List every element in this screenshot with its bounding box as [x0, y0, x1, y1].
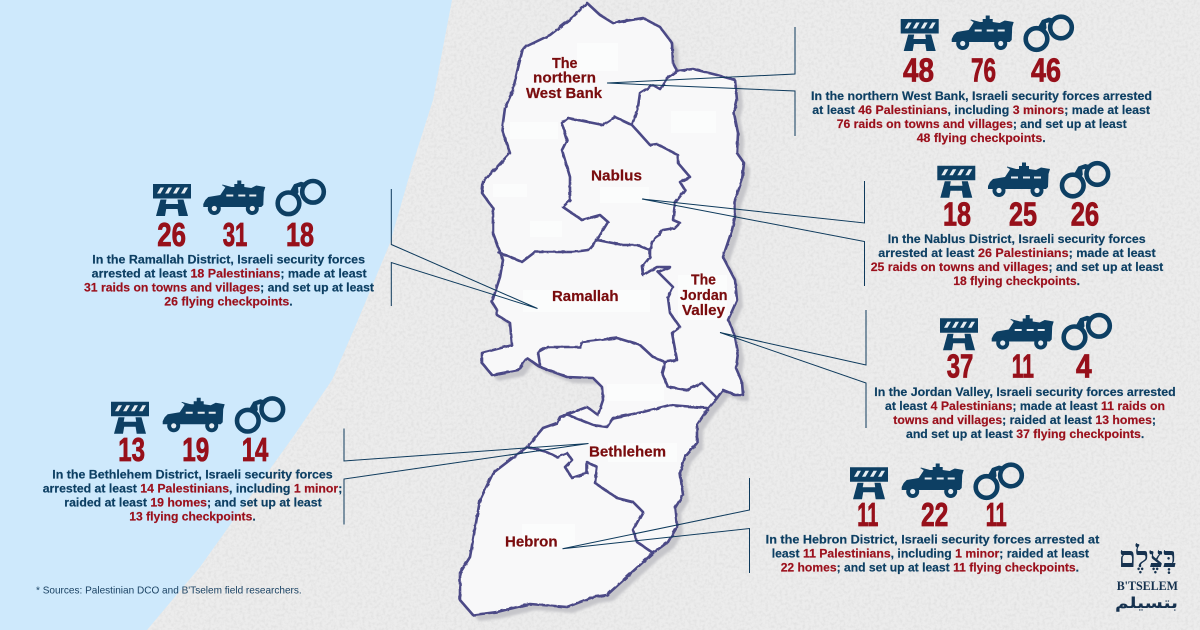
region label: Jordan Valley: The: [691, 272, 716, 288]
panel: Bethlehem: [43, 398, 342, 523]
logo: B'Tselem: بتسيلم: [1115, 594, 1178, 612]
number: flying checkpoints: 18: [943, 196, 971, 233]
sources note: * Sources: Palestinian DCO and B'Tselem field researchers.: [36, 584, 302, 596]
icon: barrier: [940, 318, 978, 350]
text block: [84, 252, 374, 308]
text block: 26 flying checkpoints.: [164, 294, 293, 308]
icon: barrier: [850, 467, 888, 499]
text block: [874, 385, 1176, 441]
icon: handcuffs: [976, 465, 1022, 498]
panel: northern West Bank: [811, 16, 1152, 145]
number: flying checkpoints: 37: [947, 347, 973, 384]
leader lines: Hebron: [562, 478, 750, 573]
number: arrests: 11: [986, 496, 1007, 533]
text block: In the Nablus District, Israeli security forces: [888, 232, 1146, 246]
icon: handcuffs: [1026, 17, 1072, 50]
text block: In the northern West Bank, Israeli security forces arrested: [811, 89, 1152, 103]
region label: Hebron: Hebron: [505, 534, 558, 550]
number: arrests: 14: [242, 431, 269, 468]
number: flying checkpoints: 26: [157, 216, 186, 253]
district borders: [460, 3, 744, 615]
icon: handcuffs: [237, 398, 283, 432]
icon: military vehicle: [952, 16, 1014, 50]
icon: military vehicle: [988, 162, 1050, 197]
region label: Jordan Valley: Valley: [682, 303, 725, 319]
icon: barrier: [937, 166, 975, 198]
leader lines: Jordan Valley: [720, 310, 866, 428]
panel: Nablus: [871, 162, 1163, 288]
text block: at least 46 Palestinians, including 3 minors; made at least: [812, 103, 1150, 117]
number: arrests: 26: [1071, 196, 1099, 233]
leader lines: Nablus: [642, 181, 864, 286]
logo: B'Tselem: [1115, 542, 1178, 612]
number: raids: 31: [223, 216, 247, 253]
icon: handcuffs: [1064, 315, 1110, 348]
text block: at least 4 Palestinians; made at least 11 raids on: [885, 399, 1165, 413]
text block: arrested at least 18 Palestinians; made at least: [92, 266, 367, 280]
text block: arrested at least 14 Palestinians, including 1 minor;: [43, 481, 342, 495]
region label: northern West Bank: [526, 56, 603, 102]
number: flying checkpoints: 48: [903, 52, 934, 89]
text block: towns and villages; raided at least 13 homes;: [893, 413, 1156, 427]
icon: barrier: [901, 19, 939, 51]
text block: arrested at least 26 Palestinians; made at least: [878, 246, 1156, 260]
text block: 25 raids on towns and villages; and set up at least: [871, 260, 1163, 274]
text block: In the Bethlehem District, Israeli security forces: [52, 467, 333, 481]
map shadow: [466, 9, 750, 621]
icon: military vehicle: [163, 398, 225, 432]
sea: [0, 0, 452, 630]
number: flying checkpoints: 13: [118, 431, 145, 468]
text block: In the Jordan Valley, Israeli security forces arrested: [874, 385, 1176, 399]
text block: [811, 89, 1152, 145]
number: raids: 11: [1012, 347, 1034, 384]
text block: least 11 Palestinians, including 1 minor; raided at least: [772, 546, 1089, 560]
icon: military vehicle: [992, 315, 1054, 350]
leader lines: northern West Bank: [607, 27, 795, 136]
text block: raided at least 19 homes; and set up at least: [64, 495, 322, 509]
panel: Ramallah: [84, 180, 374, 308]
text block: 48 flying checkpoints.: [917, 131, 1046, 145]
icon: barrier: [111, 402, 149, 434]
number: flying checkpoints: 11: [857, 496, 878, 533]
icon: military vehicle: [203, 180, 265, 215]
faint label patches: [493, 43, 727, 547]
text block: 13 flying checkpoints.: [129, 509, 256, 523]
icon: barrier: [153, 184, 191, 216]
panel: Jordan Valley: [874, 315, 1176, 441]
text block: 31 raids on towns and villages; and set up at least: [84, 280, 374, 294]
region label: northern West Bank: West Bank: [526, 86, 603, 102]
region label: Jordan Valley: [680, 272, 728, 319]
number: arrests: 4: [1076, 347, 1092, 384]
panel: Hebron: [766, 464, 1099, 574]
text block: [766, 532, 1099, 574]
leader lines: Ramallah: [391, 189, 538, 308]
logo: B'Tselem: B'TSELEM: [1117, 578, 1178, 593]
leader lines: Bethlehem: [344, 428, 588, 524]
text block: In the Hebron District, Israeli security forces arrested at: [766, 532, 1099, 546]
icon: military vehicle: [902, 464, 964, 498]
icon: handcuffs: [1062, 163, 1108, 196]
region label: Bethlehem: Bethlehem: [589, 444, 666, 460]
logo: B'Tselem: בְּצֶלֶם: [1119, 542, 1176, 574]
region label: Nablus: Nablus: [591, 168, 642, 184]
number: raids: 19: [182, 431, 209, 468]
region label: northern West Bank: northern: [533, 70, 596, 86]
region label: Jordan Valley: Jordan: [680, 288, 728, 304]
text block: [43, 467, 342, 523]
number: raids: 76: [971, 52, 996, 89]
number: arrests: 18: [286, 216, 314, 253]
text block: 76 raids on towns and villages; and set up at least: [837, 117, 1127, 131]
text block: [871, 232, 1163, 288]
text block: In the Ramallah District, Israeli security forces: [92, 252, 365, 266]
region label: northern West Bank: The: [552, 56, 578, 72]
map land: [460, 3, 744, 615]
number: arrests: 46: [1031, 52, 1061, 89]
map of the West Bank: [460, 3, 750, 621]
text block: 22 homes; and set up at least 11 flying checkpoints.: [781, 560, 1079, 574]
number: raids: 22: [921, 496, 948, 533]
number: raids: 25: [1009, 196, 1037, 233]
region label: Ramallah: Ramallah: [552, 289, 618, 305]
icon: handcuffs: [278, 181, 324, 214]
text block: and set up at least 37 flying checkpoints.: [906, 427, 1144, 441]
text block: 18 flying checkpoints.: [953, 274, 1080, 288]
